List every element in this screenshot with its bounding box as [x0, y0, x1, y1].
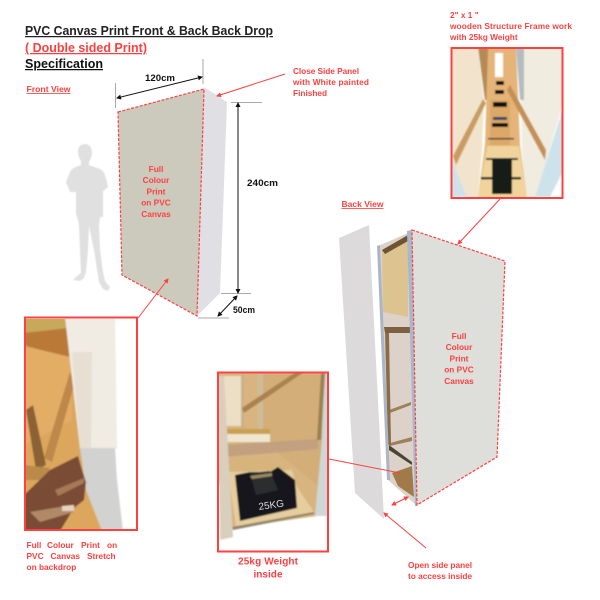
callout: close side panel: Close Side Panel: [293, 66, 359, 76]
arrow: frame photo to back view: [458, 198, 501, 244]
label: back print: [444, 331, 474, 386]
dimension: 240cm: 240cm: [247, 178, 278, 188]
blue edges: [452, 160, 467, 197]
caption: canvas stretch: Stretch: [87, 551, 116, 561]
callout: frame caption: [449, 10, 572, 42]
weights: [496, 81, 504, 85]
label: back view: Back View: [342, 199, 384, 209]
label: front print: [141, 164, 171, 219]
photo: wooden frame: [450, 47, 564, 199]
callout: close side panel: [217, 66, 369, 98]
title: [25, 24, 273, 71]
label: front print: Print: [147, 186, 166, 196]
floor: [228, 470, 314, 527]
label: back print: Full: [452, 331, 466, 341]
removed side panel: [339, 225, 384, 519]
caption: canvas stretch: on backdrop: [26, 562, 76, 572]
caption: canvas stretch: [26, 540, 117, 572]
callout: frame caption: wooden Structure Frame work: [449, 21, 572, 31]
callout: frame caption: 2" x 1 ": [450, 10, 479, 20]
caption: canvas stretch: Canvas: [50, 551, 80, 561]
caption: 25kg weight: [238, 556, 299, 580]
callout: close side panel: with White painted: [292, 77, 369, 87]
caption: canvas stretch: on: [107, 540, 117, 550]
title: ( Double sided Print): [25, 41, 147, 55]
diagonal beams: [453, 99, 486, 165]
caption: canvas stretch: Colour: [47, 540, 75, 550]
caption: 25kg weight: inside: [254, 570, 283, 580]
back wall: [218, 373, 328, 528]
photo: canvas stretch: [24, 317, 137, 531]
arrow: weight photo to interior: [329, 459, 400, 473]
walls: [450, 47, 484, 199]
side posts: [218, 376, 233, 540]
dimension: 50cm: 50cm: [233, 305, 255, 315]
label: back print: Colour: [446, 342, 473, 352]
callout: open side panel: to access inside: [408, 571, 472, 581]
label: front print: Colour: [143, 175, 170, 185]
central ladder: [478, 47, 527, 199]
dimension: 120cm: [116, 59, 203, 108]
open interior: [378, 233, 416, 505]
callout: open side panel: [384, 513, 472, 581]
weight block: [235, 467, 297, 521]
caption: 25kg weight: 25kg Weight: [238, 556, 299, 568]
arrow: front face to canvas photo: [138, 279, 168, 318]
label: back print: on PVC: [444, 364, 474, 374]
hand: [24, 456, 86, 531]
shelf: [222, 439, 318, 457]
printed front face: [118, 89, 204, 316]
printed back face: [412, 230, 505, 505]
callout: open side panel: Open side panel: [408, 560, 472, 570]
label: back print: Canvas: [444, 376, 474, 386]
label: front print: Canvas: [141, 209, 171, 219]
caption: canvas stretch: Full: [26, 540, 41, 550]
caption: canvas stretch: Print: [81, 540, 100, 550]
callout: close side panel: Finished: [293, 88, 327, 98]
far door: [222, 376, 242, 426]
dimension: 120cm: 120cm: [145, 73, 175, 83]
icon: person silhouette: [66, 144, 110, 291]
callout: frame caption: with 25kg Weight: [449, 32, 518, 42]
title: PVC Canvas Print Front & Back Back Drop: [25, 24, 273, 38]
side panel: [197, 87, 227, 316]
illustration: back view box: [339, 225, 505, 519]
caption: canvas stretch: PVC: [26, 551, 44, 561]
canvas fold: [65, 317, 117, 449]
illustration: front view box: [118, 87, 227, 316]
blue frame edges: [377, 245, 390, 480]
dimension: 50cm: [198, 296, 255, 318]
label: back print: Print: [450, 354, 469, 364]
weight marking: 25KG: [258, 498, 285, 513]
label: front print: on PVC: [141, 198, 171, 208]
label: front view: Front View: [26, 84, 71, 94]
photo: 25kg weight: [218, 372, 328, 552]
title: Specification: [25, 57, 103, 71]
label: front print: Full: [149, 164, 163, 174]
arrow: panel gap: [392, 497, 408, 505]
